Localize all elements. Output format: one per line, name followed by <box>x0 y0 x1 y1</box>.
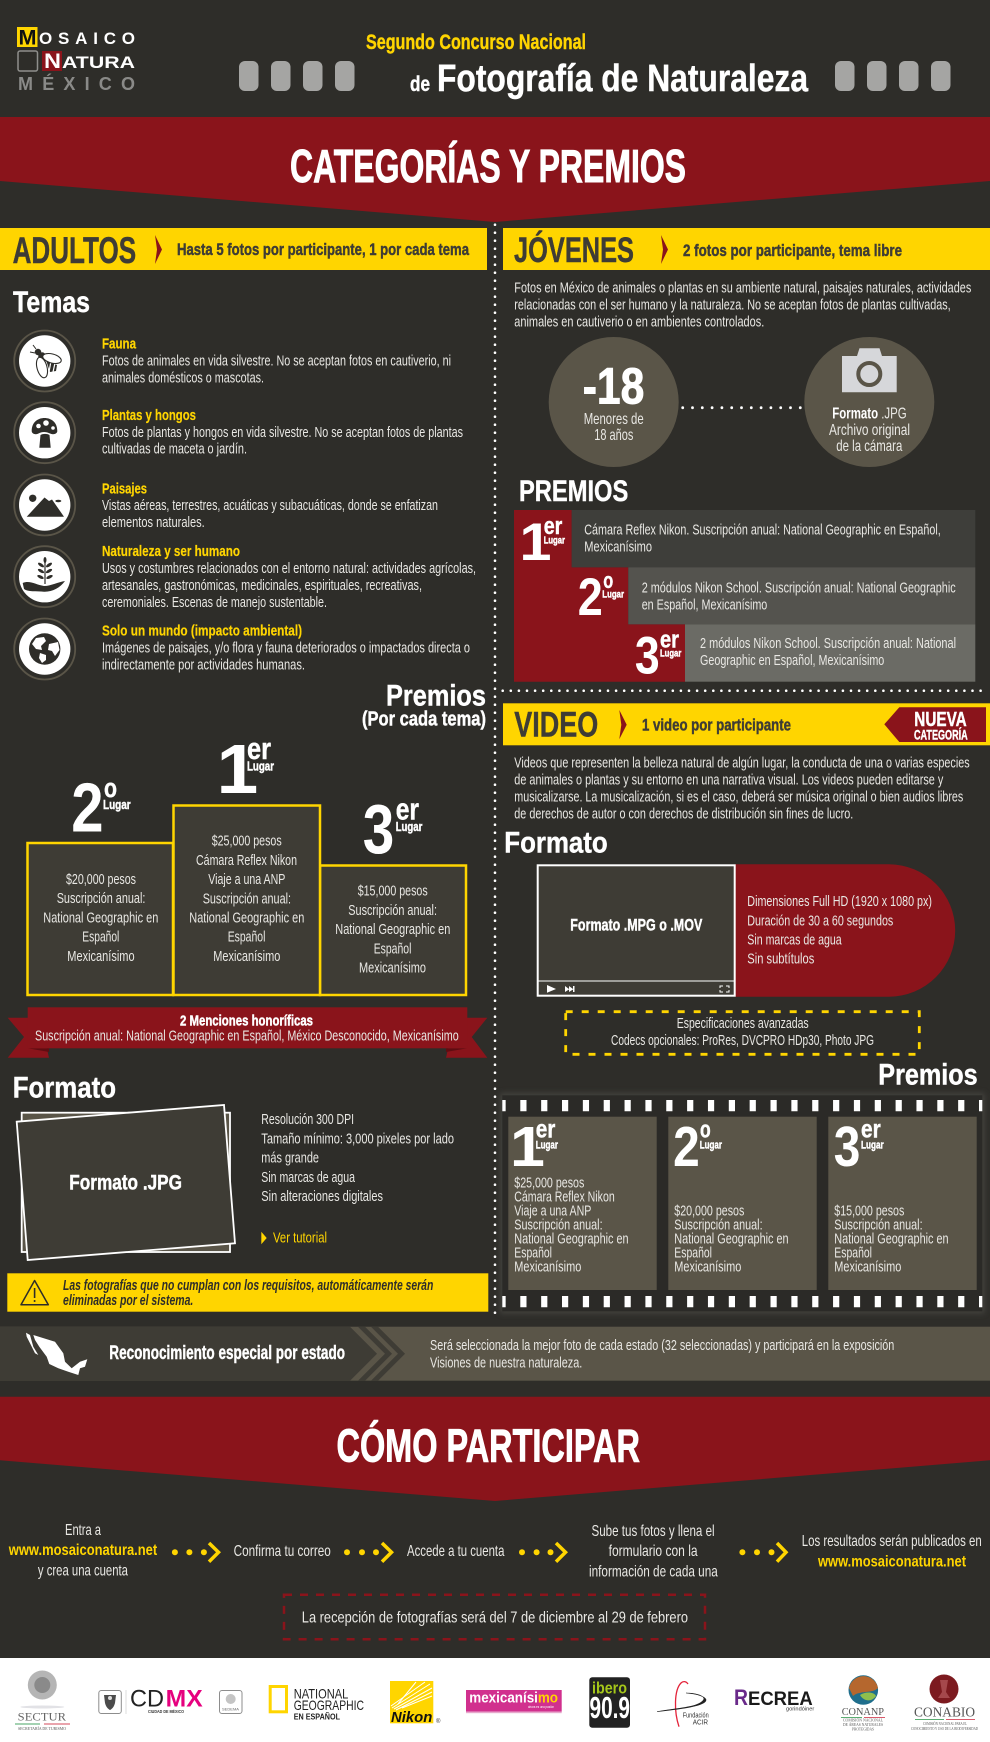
text: paisajes: Vistas aéreas, terrestres, acuáticas y subacuáticas, donde se enfatizan <box>102 498 438 514</box>
film perforations left <box>239 61 354 91</box>
logo: Fundación ACIR: Fundación <box>683 1713 709 1720</box>
logo: National Geographic: GEOGRAPHIC <box>294 1697 364 1713</box>
film card: second place: National Geographic en <box>674 1232 789 1248</box>
heading: formato: Formato <box>13 1072 116 1105</box>
warning bar <box>7 1273 488 1312</box>
podium: second place: Lugar <box>103 797 131 812</box>
podium: second place: o <box>104 773 117 803</box>
text: fauna: Fauna <box>102 336 137 352</box>
reception dates dashed box: La recepción de fotografías será del 7 de diciembre al 29 de febrero <box>302 1610 688 1627</box>
red spec pill <box>735 864 955 997</box>
heading: premios por cada tema: (Por cada tema) <box>362 709 486 731</box>
logo: CDMX <box>99 1686 242 1714</box>
heading bar: adultos: ADULTOS <box>13 230 136 271</box>
podium: third place: $15,000 pesos <box>358 884 428 900</box>
contest title: Fotografía de Naturaleza <box>437 58 809 100</box>
step 4 <box>589 1523 718 1581</box>
text: fauna: Fotos de animales en vida silvestre. No se aceptan fotos en cautiverio, ni <box>102 353 451 369</box>
film card: third place: er <box>861 1116 881 1144</box>
logo: CONANP: CONANP <box>842 1706 884 1718</box>
podium: second place: Mexicanísimo <box>67 949 135 965</box>
heading: temas: Temas <box>13 286 90 319</box>
logo: CDMX: CIUDAD DE MÉXICO <box>148 1707 184 1714</box>
text: plantas y hongos: cultivadas de maceta o jardín. <box>102 442 247 458</box>
row: third place: 3 <box>635 626 660 685</box>
text: plantas y hongos <box>102 408 463 458</box>
film card: third place: Suscripción anual: <box>834 1218 923 1234</box>
podium: second place: 2 <box>71 769 104 847</box>
steps flow <box>8 1522 982 1581</box>
logo: Recrea: gorindóiner <box>786 1707 815 1713</box>
logo: CONABIO <box>911 1674 978 1731</box>
band: reconocimiento especial por estado <box>0 1327 990 1381</box>
logo: CONANP: COMISIÓN NACIONAL <box>843 1718 884 1722</box>
film card: first place: Viaje a una ANP <box>514 1203 591 1219</box>
advanced specs dashed box: Especificaciones avanzadas <box>677 1016 809 1032</box>
advanced specs dashed box: Codecs opcionales: ProRes, DVCPRO HDp30, Photo JPG <box>611 1033 874 1049</box>
podium: second place: National Geographic en <box>43 910 158 926</box>
list: requisitos foto <box>261 1112 454 1205</box>
red spec pill: Duración de 30 a 60 segundos <box>747 913 893 929</box>
tag: nueva categoría: NUEVA <box>914 709 967 731</box>
header <box>17 26 950 100</box>
podium: first place: National Geographic en <box>189 910 304 926</box>
arrow 4 <box>739 1543 786 1562</box>
logo: Recrea: ECREA <box>748 1689 813 1710</box>
list: requisitos foto: Sin marcas de agua <box>261 1170 356 1186</box>
logo: mexicanísimo: mexicanísimo <box>469 1689 558 1706</box>
icon: bee <box>14 330 75 392</box>
row: second place: 2 <box>578 568 603 627</box>
advanced specs dashed box <box>566 1012 919 1054</box>
ribbon: menciones honoríficas <box>8 1007 487 1058</box>
badge: formato jpg: de la cámara <box>836 438 902 455</box>
badge: menores de 18: Menores de <box>584 411 644 428</box>
text: descripción jóvenes: animales en cautiverio o en ambientes controlados. <box>514 315 764 331</box>
photo card: formato jpg: Formato .JPG <box>69 1171 182 1194</box>
logo: Nikon: ® <box>436 1718 441 1725</box>
icon: landscape <box>14 474 75 536</box>
podium: third place: Lugar <box>396 819 422 834</box>
film card: second place: $20,000 pesos <box>674 1204 744 1220</box>
banner: cómo participar: CÓMO PARTICIPAR <box>336 1420 640 1472</box>
row: first place: 1 <box>520 513 552 572</box>
staircase prizes table <box>514 510 975 685</box>
film card: second place: Suscripción anual: <box>674 1218 763 1234</box>
film card: second place <box>668 1115 817 1290</box>
icon: camera <box>842 348 897 392</box>
heading bar: jóvenes: 2 fotos por participante, tema libre <box>683 241 902 260</box>
row: third place: Geographic en Español, Mexicanísimo <box>700 653 884 669</box>
podium: third place: National Geographic en <box>335 922 450 938</box>
logo: Recrea <box>734 1685 815 1713</box>
film card: first place: 1 <box>510 1115 545 1179</box>
film card: third place: National Geographic en <box>834 1232 949 1248</box>
text: fauna <box>102 336 451 386</box>
heading: formato video: Formato <box>504 826 608 859</box>
text: solo un mundo: indirectamente por actividades humanas. <box>102 658 305 674</box>
video player frame <box>538 865 735 996</box>
film card: third place: Español <box>834 1246 872 1262</box>
logo: Nikon <box>390 1681 441 1726</box>
film card: third place <box>828 1115 977 1290</box>
step 4: formulario con la <box>609 1543 698 1560</box>
film card: first place: Cámara Reflex Nikon <box>514 1189 615 1205</box>
text: paisajes <box>102 481 438 531</box>
podium: third place: er <box>396 791 419 826</box>
logo: National Geographic <box>270 1685 364 1721</box>
row: first place: er <box>544 513 562 540</box>
badge: menores de 18: 18 años <box>594 427 633 444</box>
logo: mexicanísimo: ahora es una pasión <box>528 1705 554 1709</box>
film card: second place: Español <box>674 1246 712 1262</box>
step 5 <box>802 1533 982 1571</box>
logo: National Geographic: NATIONAL <box>294 1685 348 1701</box>
podium: second place: Español <box>82 930 119 946</box>
heading bar: adultos: Hasta 5 fotos por participante, 1 por cada tema <box>177 240 469 259</box>
logo: National Geographic: EN ESPAÑOL <box>294 1711 340 1721</box>
band: reconocimiento especial por estado: Reconocimiento especial por estado <box>109 1343 345 1364</box>
text: naturaleza y ser humano: Naturaleza y ser humano <box>102 544 240 560</box>
logo: Mosaico Natura México <box>17 26 135 94</box>
icon: mushroom <box>14 402 75 463</box>
step 1: www.mosaiconatura.net <box>8 1542 158 1559</box>
badge: formato jpg <box>804 337 934 467</box>
row: second place <box>578 567 975 627</box>
row: second place: en Español, Mexicanísimo <box>642 597 767 613</box>
podium: first place: Viaje a una ANP <box>208 872 285 888</box>
text: solo un mundo: Imágenes de paisajes, y/o flora y fauna deteriorados o impactados directa o <box>102 641 470 657</box>
heading bar: video <box>503 703 990 745</box>
film card: second place: Mexicanísimo <box>674 1260 741 1276</box>
step 3: Accede a tu cuenta <box>407 1543 504 1560</box>
podium: second place: Suscripción anual: <box>57 891 145 907</box>
logo: Ibero 90.9: 90.9 <box>590 1690 630 1725</box>
heading: premios por cada tema: Premios <box>386 680 486 713</box>
banner: categorías y premios: CATEGORÍAS Y PREMIOS <box>290 140 686 192</box>
logo: Mosaico Natura México: OSAICO <box>39 29 135 48</box>
row: third place <box>635 624 975 685</box>
logo: Fundación ACIR: ACIR <box>693 1719 708 1726</box>
film strip prizes <box>500 1093 985 1314</box>
row: first place: Lugar <box>544 535 565 546</box>
text: descripción video <box>514 755 970 822</box>
icon: globe <box>14 618 75 680</box>
arrow 1 <box>172 1543 218 1562</box>
film card: first place: National Geographic en <box>514 1231 629 1247</box>
text: solo un mundo <box>102 624 470 674</box>
film card: first place: $25,000 pesos <box>514 1175 584 1191</box>
column divider dotted <box>495 225 985 1320</box>
arrow 3 <box>519 1543 566 1562</box>
text: naturaleza y ser humano: ceremoniales. Escenas de manejo sustentable. <box>102 595 327 611</box>
film card: first place: Español <box>514 1245 552 1261</box>
podium: first place <box>174 730 320 995</box>
link: ver tutorial: Ver tutorial <box>273 1231 327 1247</box>
link: ver tutorial <box>261 1231 327 1247</box>
text: solo un mundo: Solo un mundo (impacto ambiental) <box>102 624 302 640</box>
contest title: de <box>410 73 430 96</box>
tag: nueva categoría <box>884 707 986 742</box>
list: requisitos foto: Tamaño mínimo: 3,000 pixeles por lado <box>261 1131 454 1147</box>
podium: first place: Lugar <box>247 759 274 774</box>
step 4: Sube tus fotos y llena el <box>592 1523 715 1540</box>
heading bar: video: 1 video por participante <box>642 716 791 735</box>
warning bar: Las fotografías que no cumplan con los requisitos, automáticamente serán <box>63 1278 433 1294</box>
reception dates dashed box <box>284 1595 705 1639</box>
text: naturaleza y ser humano <box>102 544 476 611</box>
film card: second place: Lugar <box>700 1139 723 1151</box>
row: first place: Mexicanísimo <box>584 540 652 556</box>
podium: first place: 1 <box>217 730 258 808</box>
step 1: y crea una cuenta <box>38 1563 128 1580</box>
film card: first place: er <box>536 1116 556 1144</box>
logo: CONANP <box>841 1675 885 1732</box>
film perforations right <box>835 61 950 91</box>
red spec pill: Sin marcas de agua <box>747 933 842 949</box>
heading: premios: PREMIOS <box>519 475 628 508</box>
row: second place: o <box>603 568 613 593</box>
logo: Ibero 90.9: ibero <box>592 1678 627 1697</box>
banner: categorías y premios <box>0 117 990 222</box>
panel: video <box>500 703 990 1314</box>
step 4: información de cada una <box>589 1564 718 1581</box>
warning bar: eliminadas por el sistema. <box>63 1293 193 1309</box>
logo: Ibero 90.9 <box>589 1677 630 1728</box>
podium: second place: $20,000 pesos <box>66 872 136 888</box>
text: fauna: animales domésticos o mascotas. <box>102 370 264 386</box>
film card: first place: Mexicanísimo <box>514 1259 581 1275</box>
text: descripción video: de derechos de autor o con derechos de distribución sin fines de lucro. <box>514 806 853 822</box>
podium: third place: Español <box>374 941 411 957</box>
film card: third place: Lugar <box>861 1139 884 1151</box>
red spec pill: Sin subtítulos <box>747 952 814 968</box>
logo: CDMX: CD <box>130 1686 164 1713</box>
podium: first place: er <box>247 731 271 766</box>
heading bar: jóvenes: JÓVENES <box>514 230 634 270</box>
logo: CONABIO: CONABIO <box>914 1706 975 1721</box>
badge: formato jpg: Archivo original <box>829 422 910 439</box>
podium: third place: Suscripción anual: <box>348 903 437 919</box>
film card: second place: 2 <box>673 1115 700 1179</box>
podium: first place: Mexicanísimo <box>213 949 280 965</box>
panel: adultos <box>0 228 488 1312</box>
badge: menores de 18: -18 <box>583 357 644 414</box>
film card: first place: Suscripción anual: <box>514 1217 603 1233</box>
row: third place: Lugar <box>660 649 681 660</box>
band: reconocimiento especial por estado: Visiones de nuestra naturaleza. <box>430 1355 582 1371</box>
text: plantas y hongos: Plantas y hongos <box>102 408 196 424</box>
step 2: Confirma tu correo <box>234 1543 331 1560</box>
step 1: Entra a <box>65 1522 101 1539</box>
text: paisajes: elementos naturales. <box>102 515 205 531</box>
text: descripción jóvenes <box>514 281 971 331</box>
icon: hand and plant <box>14 546 75 607</box>
list: requisitos foto: Sin alteraciones digitales <box>261 1189 383 1205</box>
film card: second place: o <box>700 1116 711 1143</box>
row: third place: er <box>660 626 679 653</box>
text: paisajes: Paisajes <box>102 481 147 497</box>
logo: Nikon: Nikon <box>391 1709 432 1726</box>
text: naturaleza y ser humano: Usos y costumbres relacionados con el entorno natural: actividades agrícolas, <box>102 561 476 577</box>
red spec pill: Dimensiones Full HD (1920 x 1080 px) <box>747 894 932 910</box>
podium: third place: Mexicanísimo <box>359 960 426 976</box>
icon: map of Mexico <box>26 1333 87 1375</box>
podium: third place: 3 <box>363 790 394 868</box>
logo: mexicanísimo <box>466 1689 562 1713</box>
logo: CONABIO: COMISIÓN NACIONAL PARA EL <box>923 1721 967 1726</box>
logo: CDMX: SEDEMA <box>222 1708 239 1712</box>
ribbon: menciones honoríficas: Suscripción anual: National Geographic en Español, México Desconocido, Mexicanísimo <box>35 1029 459 1045</box>
text: naturaleza y ser humano: artesanales, gastronómicas, medicinales, espirituales, recreativas, <box>102 578 422 594</box>
row: first place <box>520 510 975 572</box>
logo: Fundación ACIR <box>657 1682 709 1727</box>
logo: CONANP: PROTEGIDAS <box>852 1726 874 1732</box>
podium: first place: $25,000 pesos <box>212 834 282 850</box>
logo: SECTUR: SECTUR <box>18 1710 66 1724</box>
list: requisitos foto: más grande <box>261 1151 319 1167</box>
logo: Mosaico Natura México: ATURA <box>62 53 135 72</box>
logo: CONANP: DE ÁREAS NATURALES <box>843 1722 883 1727</box>
logo: SECTUR: SECRETARÍA DE TURISMO <box>18 1726 67 1731</box>
heading bar: adultos <box>0 228 487 271</box>
film card: third place: 3 <box>834 1115 860 1179</box>
panel: jóvenes <box>503 228 990 685</box>
ribbon: menciones honoríficas: 2 Menciones honoríficas <box>180 1013 313 1030</box>
photo card: formato jpg <box>17 1105 235 1260</box>
film card: third place: $15,000 pesos <box>834 1204 904 1220</box>
podium: second place <box>28 769 173 995</box>
logo: Mosaico Natura México: M <box>18 26 36 50</box>
badge: formato jpg: Formato .JPG <box>832 406 907 423</box>
arrow 2 <box>344 1543 392 1562</box>
podium: first place: Cámara Reflex Nikon <box>196 853 297 869</box>
banner: cómo participar <box>0 1397 990 1501</box>
film card: first place <box>508 1115 657 1290</box>
text: plantas y hongos: Fotos de plantas y hongos en vida silvestre. No se aceptan fotos de plantas <box>102 425 463 441</box>
podium: first place: Suscripción anual: <box>203 891 291 907</box>
icon: fullscreen <box>720 986 729 992</box>
icon: skip <box>565 986 574 992</box>
contest subtitle: Segundo Concurso Nacional <box>366 31 586 54</box>
logo: Recrea: R <box>734 1685 748 1710</box>
logo: Mosaico Natura México: MÉXICO <box>18 73 135 94</box>
film card: first place: Lugar <box>536 1139 559 1151</box>
video player frame: Formato .MPG o .MOV <box>570 916 703 935</box>
podium: first place: Español <box>228 930 265 946</box>
heading bar: jóvenes <box>503 228 990 270</box>
footer: sponsor logos <box>0 1658 990 1742</box>
row: second place: Lugar <box>602 590 624 601</box>
step 1 <box>8 1522 158 1580</box>
logo: Mosaico Natura México: N <box>44 50 61 73</box>
list: requisitos foto: Resolución 300 DPI <box>261 1112 354 1128</box>
heading bar: video: VIDEO <box>514 706 598 745</box>
film card: third place: Mexicanísimo <box>834 1260 901 1276</box>
logo: CDMX: MX <box>166 1686 203 1713</box>
badge: menores de 18 <box>549 337 679 467</box>
dotted connector <box>683 406 801 409</box>
heading: premios por cada tema <box>362 680 486 731</box>
logo: SECTUR <box>15 1670 70 1731</box>
icon: play <box>547 985 556 993</box>
podium: third place <box>320 790 466 995</box>
